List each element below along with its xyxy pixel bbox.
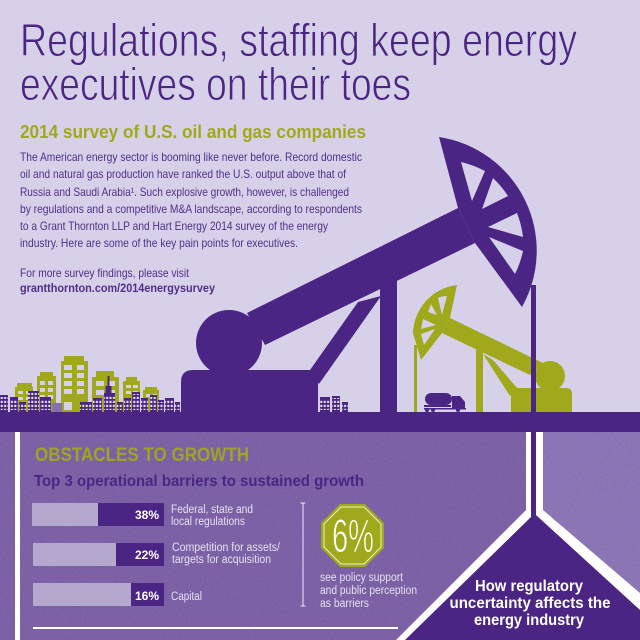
survey link text bbox=[20, 267, 215, 295]
bar labels: Competition for assets/ bbox=[172, 542, 281, 554]
icon: tanker truck bbox=[424, 393, 466, 412]
title: executives on their toes bbox=[20, 58, 411, 110]
intro text block: industry. Here are some of the key pain points for executives. bbox=[20, 237, 298, 250]
pipe and callout: regulatory uncertainty bbox=[396, 432, 640, 640]
subheading: 2014 survey of U.S. oil and gas companies bbox=[20, 122, 366, 142]
pipe and callout: regulatory uncertainty: energy industry bbox=[474, 612, 584, 629]
icon: 6% octagon badge bbox=[321, 504, 384, 567]
survey link text: For more survey findings, please visit bbox=[20, 267, 190, 280]
vertical bracket divider bbox=[300, 503, 306, 606]
subheading: top 3 barriers: Top 3 operational barriers to sustained growth bbox=[34, 473, 364, 490]
bar labels bbox=[171, 504, 281, 603]
horizontal divider line bbox=[33, 627, 398, 629]
6% caption bbox=[320, 572, 417, 610]
bar chart: operational barriers: 16% bbox=[135, 589, 159, 603]
large purple pumpjack bbox=[181, 137, 537, 412]
city skyline: purple buildings bbox=[0, 376, 348, 412]
left white border bbox=[15, 432, 20, 640]
bar chart: operational barriers: 38% bbox=[135, 508, 159, 522]
intro text block: Russia and Saudi Arabia¹. Such explosive growth, however, is challenged bbox=[20, 186, 349, 199]
pipe and callout: regulatory uncertainty: How regulatory bbox=[475, 578, 583, 595]
bar labels: local regulations bbox=[171, 516, 245, 528]
6% caption: and public perception bbox=[320, 585, 417, 597]
ground band bbox=[0, 412, 640, 432]
pipe and callout: regulatory uncertainty: uncertainty affects the bbox=[450, 595, 611, 612]
heading: obstacles to growth: OBSTACLES TO GROWTH bbox=[35, 445, 249, 466]
intro text block bbox=[20, 151, 362, 250]
6% caption: as barriers bbox=[320, 598, 369, 610]
intro text block: oil and natural gas production have ranked the U.S. output above that of bbox=[20, 168, 347, 181]
bar labels: targets for acquisition bbox=[172, 554, 271, 566]
icon: 6% octagon badge: 6% bbox=[332, 509, 374, 562]
intro text block: The American energy sector is booming like never before. Record domestic bbox=[20, 151, 362, 164]
city skyline: green buildings bbox=[15, 356, 159, 412]
background: upper lavender panel bbox=[0, 0, 640, 412]
bar labels: Capital bbox=[171, 591, 202, 603]
panel: obstacles to growth background bbox=[0, 432, 640, 640]
bar labels: Federal, state and bbox=[171, 504, 253, 516]
intro text block: by regulations and a competitive M&A landscape, according to respondents bbox=[20, 203, 362, 216]
title bbox=[20, 14, 577, 110]
6% caption: see policy support bbox=[320, 572, 404, 584]
bar chart: operational barriers bbox=[32, 503, 164, 606]
bar chart: operational barriers: 22% bbox=[135, 548, 159, 562]
small green pumpjack bbox=[413, 285, 572, 412]
intro text block: to a Grant Thornton LLP and Hart Energy 2014 survey of the energy bbox=[20, 220, 328, 233]
survey link text: grantthornton.com/2014energysurvey bbox=[20, 282, 215, 295]
